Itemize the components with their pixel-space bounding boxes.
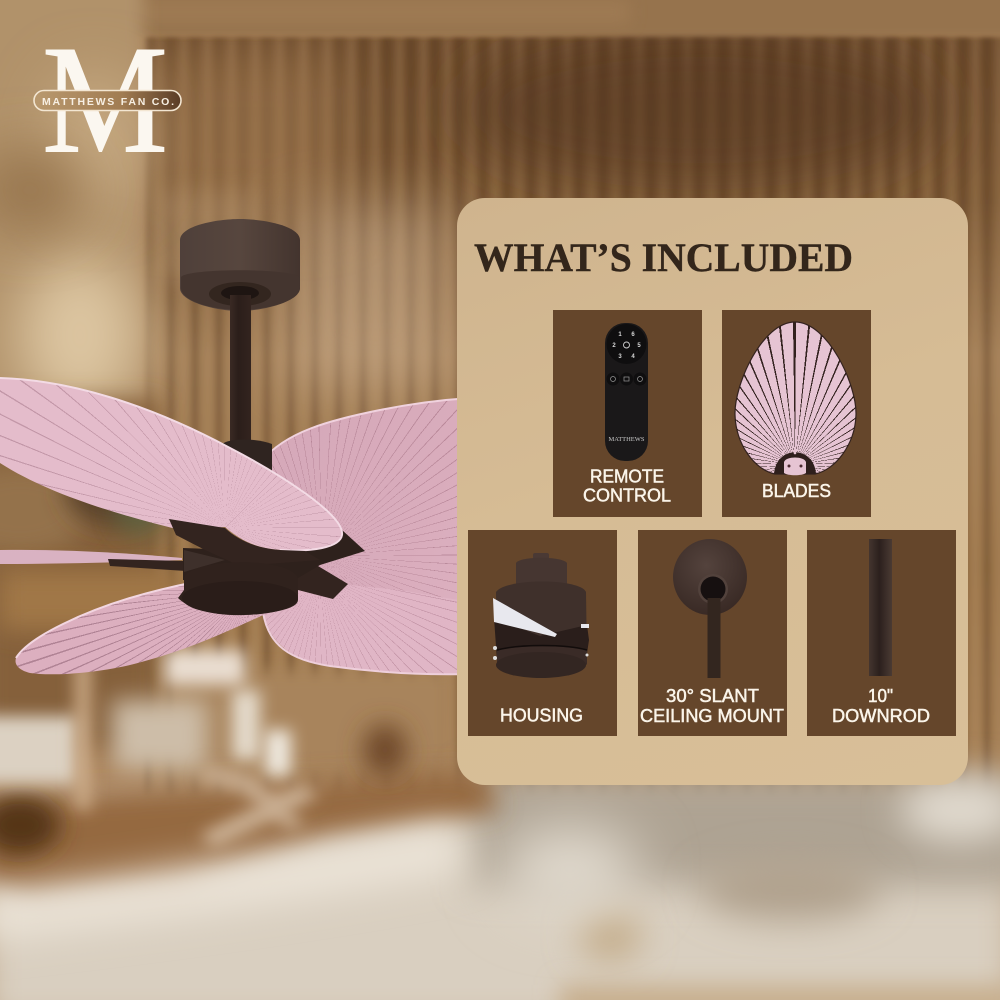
- icon: remote control: MATTHEWS: [608, 436, 645, 443]
- blade: right upper: [272, 398, 457, 600]
- logo: Matthews Fan Co.: [33, 14, 182, 180]
- label: 10 inch downrod: DOWNROD: [832, 706, 930, 726]
- logo pill badge: MATTHEWS FAN CO.: [42, 96, 174, 108]
- top band: [0, 0, 1000, 35]
- label: housing: HOUSING: [500, 706, 583, 726]
- blade: lower left: [15, 583, 266, 674]
- tile: housing: [468, 530, 617, 736]
- blade: far left edge-on: [0, 550, 182, 564]
- downrod: [230, 295, 251, 445]
- left column: [0, 0, 143, 410]
- label: 30 degree slant ceiling mount: [640, 686, 784, 726]
- label: remote control: REMOTE: [590, 466, 664, 486]
- wall: [145, 36, 1000, 796]
- tile: downrod: [807, 530, 956, 736]
- label: 10 inch downrod: [832, 686, 930, 726]
- icon: remote control: 6: [631, 332, 635, 338]
- chair and rug: [0, 770, 500, 900]
- ceiling canopy: [180, 219, 300, 311]
- panel: what's included: [457, 198, 968, 785]
- label: remote control: CONTROL: [583, 486, 671, 506]
- heading: what's included: WHAT’S INCLUDED: [474, 235, 853, 280]
- label: blades: BLADES: [762, 481, 831, 501]
- tile: remote control: [553, 310, 702, 517]
- icon: remote control: 4: [631, 354, 635, 360]
- icon: blade with ribs: [734, 321, 857, 476]
- coupling: [222, 440, 272, 480]
- icon: remote control: 2: [612, 343, 616, 349]
- lower left wall: [0, 400, 160, 750]
- floor base: [0, 800, 1000, 1000]
- icon: remote control: 5: [637, 343, 641, 349]
- tile: blades: [722, 310, 871, 517]
- icon: remote control: 3: [618, 354, 622, 360]
- label: remote control: [583, 466, 671, 506]
- tile: ceiling mount: [638, 530, 787, 736]
- blade: right lower: [262, 585, 457, 676]
- blade: top left: [0, 377, 344, 552]
- icon: remote control: 1: [618, 332, 622, 338]
- label: 30 degree slant ceiling mount: 30° SLANT: [666, 686, 759, 706]
- logo pill badge: [34, 90, 181, 110]
- label: 10 inch downrod: 10": [868, 686, 893, 706]
- label: 30 degree slant ceiling mount: CEILING MOUNT: [640, 706, 784, 726]
